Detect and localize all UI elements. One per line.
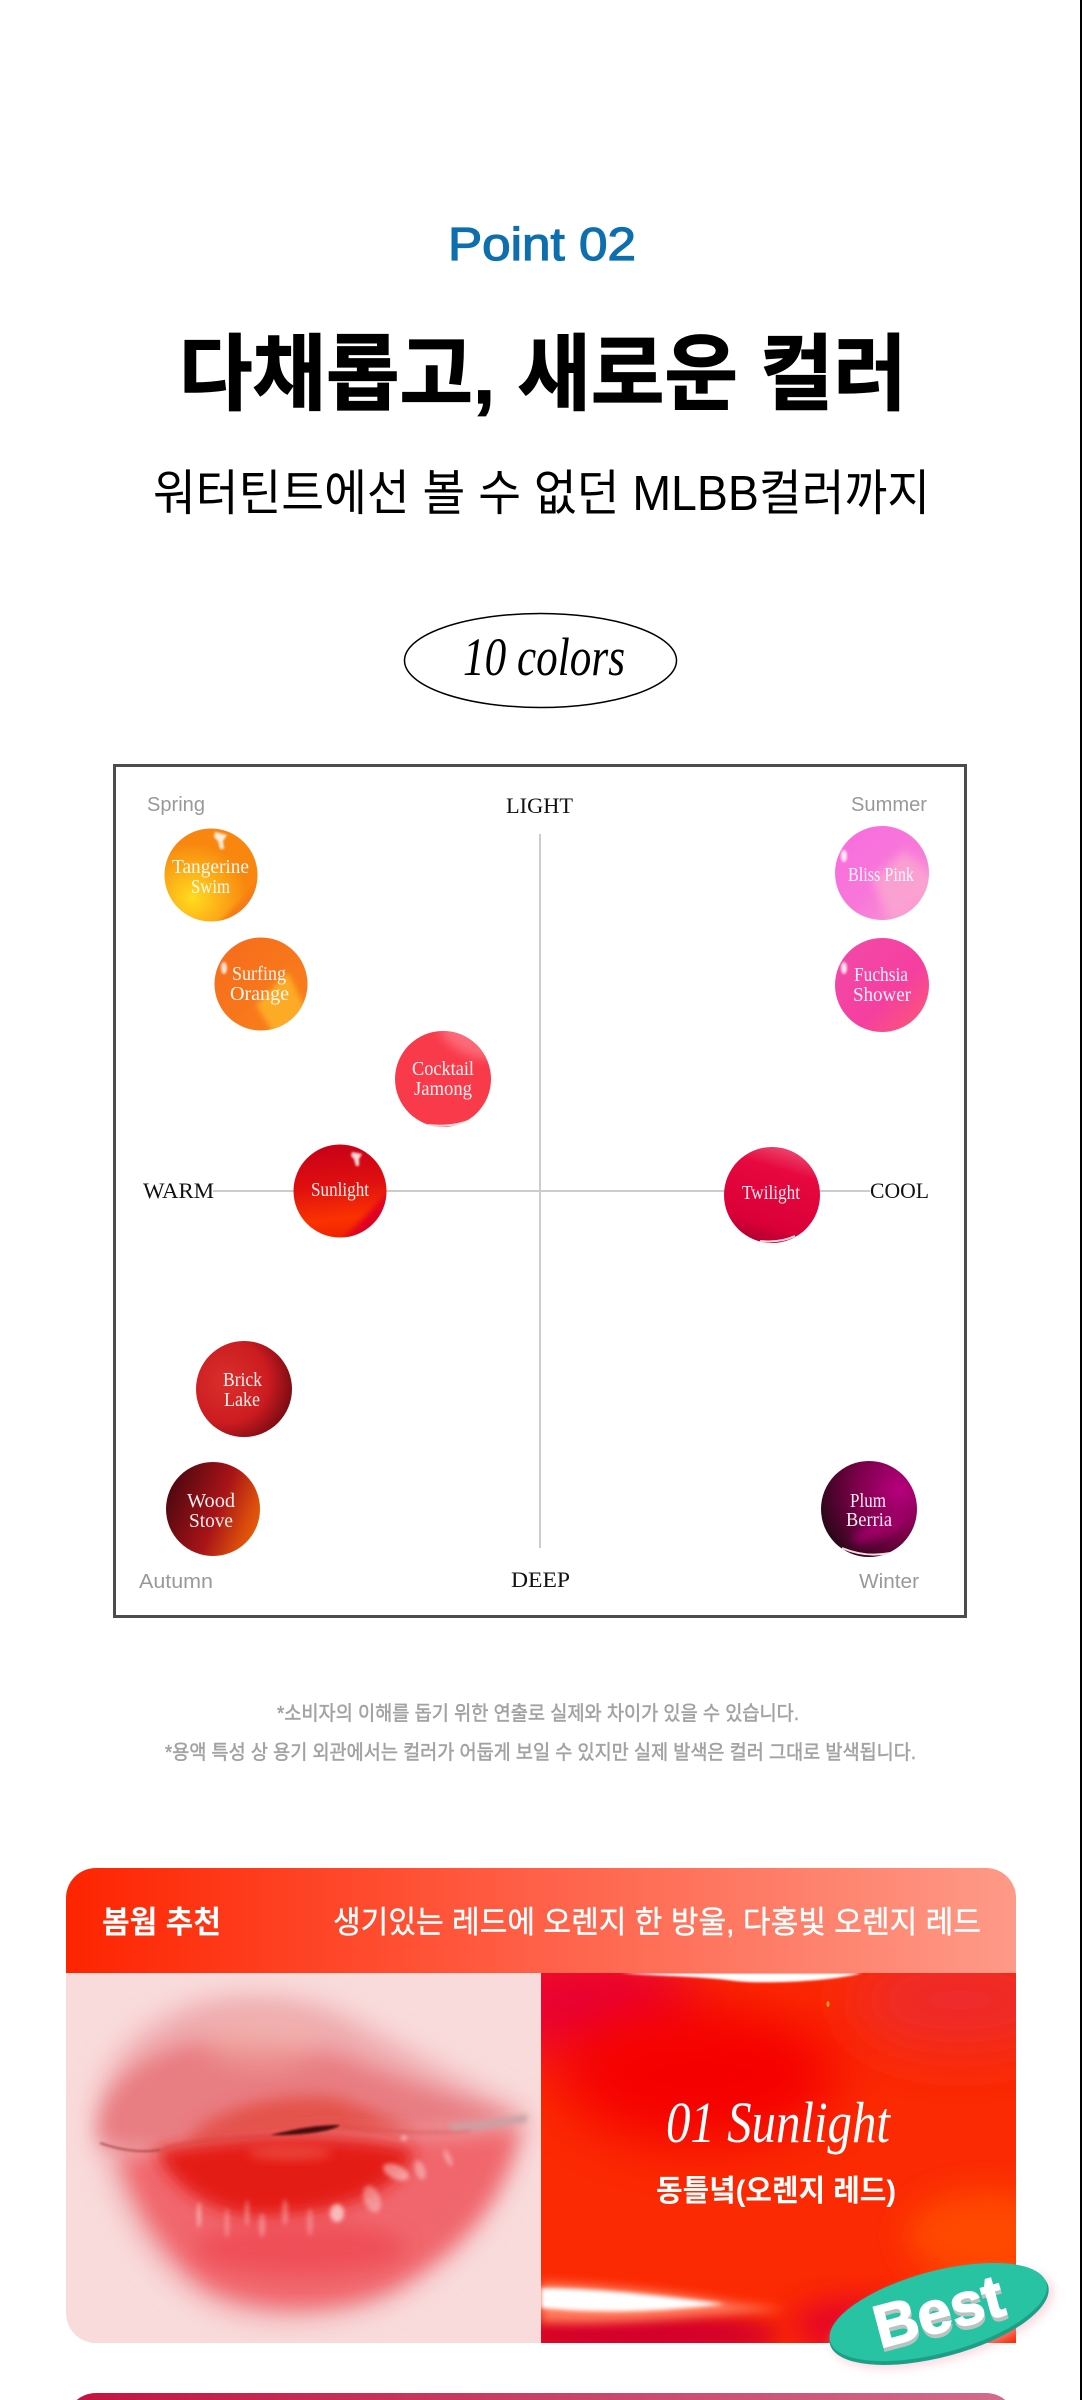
season label: Spring: Spring bbox=[147, 794, 205, 816]
top highlight bbox=[620, 1973, 862, 1982]
shade name: 01 Sunlight bbox=[666, 2090, 892, 2155]
badge: 10 colors: 10 colors bbox=[463, 627, 625, 687]
panel: Sunlight card bbox=[66, 1868, 1070, 2357]
lip photo illustration bbox=[66, 1973, 541, 2343]
small droplet bbox=[826, 2001, 830, 2007]
title: 다채롭고, 새로운 컬러 bbox=[179, 328, 907, 421]
season label: Autumn: Autumn bbox=[139, 1571, 213, 1593]
swatch: Bliss Pink bbox=[835, 826, 929, 920]
swatch: Tangerine Swim bbox=[164, 828, 258, 922]
badge text: Best bbox=[866, 2262, 1011, 2361]
swatch: Tangerine Swim: Swim bbox=[191, 876, 230, 898]
footnotes: *소비자의 이해를 돕기 위한 연출로 실제와 차이가 있을 수 있습니다. bbox=[277, 1702, 799, 1725]
next card header (cropped) bbox=[66, 2393, 1016, 2400]
colour texture panel bbox=[541, 1973, 1016, 2343]
swatch: Plum Berria: Berria bbox=[846, 1509, 892, 1531]
swatch: Wood Stove bbox=[166, 1462, 260, 1556]
shade Korean name: 동틀녘(오렌지 레드) bbox=[656, 2175, 896, 2208]
swatch: Fuchsia Shower: Fuchsia bbox=[854, 964, 908, 986]
axis label: DEEP: DEEP bbox=[511, 1567, 570, 1592]
swatch: Brick Lake bbox=[196, 1341, 292, 1437]
upper lip bbox=[100, 2039, 520, 2147]
badge: 10 colors bbox=[404, 614, 676, 708]
swatch: Cocktail Jamong: Jamong bbox=[414, 1078, 472, 1100]
season label: Winter: Winter bbox=[859, 1571, 919, 1593]
lower lip bbox=[122, 2128, 518, 2306]
swatch: Surfing Orange bbox=[214, 938, 308, 1030]
header description: 생기있는 레드에 오렌지 한 방울, 다홍빛 오렌지 레드 bbox=[333, 1905, 981, 1940]
swatch: Bliss Pink: Bliss Pink bbox=[848, 864, 914, 886]
swatch: Surfing Orange: Surfing bbox=[232, 963, 286, 985]
swatch: Twilight: Twilight bbox=[742, 1182, 800, 1204]
footnotes bbox=[165, 1702, 916, 1764]
swatch: Sunlight bbox=[294, 1144, 386, 1238]
swatch: Cocktail Jamong: Cocktail bbox=[412, 1058, 474, 1080]
swatch: Surfing Orange: Orange bbox=[230, 983, 289, 1005]
swatch: Tangerine Swim: Tangerine bbox=[172, 856, 249, 878]
swatch: Brick Lake: Brick bbox=[223, 1369, 262, 1391]
lower lip core red bbox=[155, 2137, 415, 2218]
swatch: Twilight bbox=[724, 1147, 820, 1243]
mouth corner shadow bbox=[450, 2114, 527, 2130]
axis label: LIGHT: LIGHT bbox=[506, 793, 574, 818]
swatch: Brick Lake: Lake bbox=[224, 1389, 260, 1411]
axis label: COOL: COOL bbox=[870, 1178, 929, 1203]
swatch: Fuchsia Shower bbox=[835, 938, 929, 1032]
footnotes: *용액 특성 상 용기 외관에서는 컬러가 어둡게 보일 수 있지만 실제 발색은 컬러 그대로 발색됩니다. bbox=[165, 1741, 916, 1764]
swatch: Sunlight: Sunlight bbox=[311, 1179, 369, 1201]
lip skin shading bbox=[98, 1997, 527, 2319]
mouth line left bbox=[100, 2143, 160, 2151]
swatch: Plum Berria bbox=[821, 1461, 917, 1557]
season label: Summer: Summer bbox=[851, 794, 927, 816]
lip gloss highlights bbox=[198, 2136, 455, 2238]
swatch: Wood Stove: Stove bbox=[189, 1510, 233, 1532]
axis label: WARM: WARM bbox=[143, 1178, 214, 1203]
bottom highlight bbox=[541, 2282, 785, 2323]
subtitle: 워터틴트에선 볼 수 없던 MLBB컬러까지 bbox=[153, 467, 930, 521]
heading: Point 02: Point 02 bbox=[448, 218, 636, 270]
swatch: Wood Stove: Wood bbox=[187, 1490, 235, 1512]
header label: 봄웜 추천 bbox=[102, 1905, 221, 1940]
mouth opening bbox=[270, 2125, 340, 2135]
badge: Best bbox=[818, 2242, 1063, 2389]
swatch: Fuchsia Shower: Shower bbox=[853, 984, 911, 1006]
panel: colour map bbox=[114, 766, 966, 1616]
swatch: Plum Berria: Plum bbox=[850, 1490, 886, 1512]
upper lip highlight bbox=[202, 2016, 322, 2064]
card header bbox=[66, 1868, 1016, 1973]
swatch: Cocktail Jamong bbox=[395, 1031, 491, 1127]
badge text: Best bbox=[867, 2266, 1012, 2365]
lower lip tint band bbox=[195, 2222, 405, 2274]
inner mouth sheen bbox=[248, 2146, 332, 2160]
mouth line centre bbox=[160, 2126, 470, 2150]
upper lip inner red bbox=[190, 2096, 425, 2142]
